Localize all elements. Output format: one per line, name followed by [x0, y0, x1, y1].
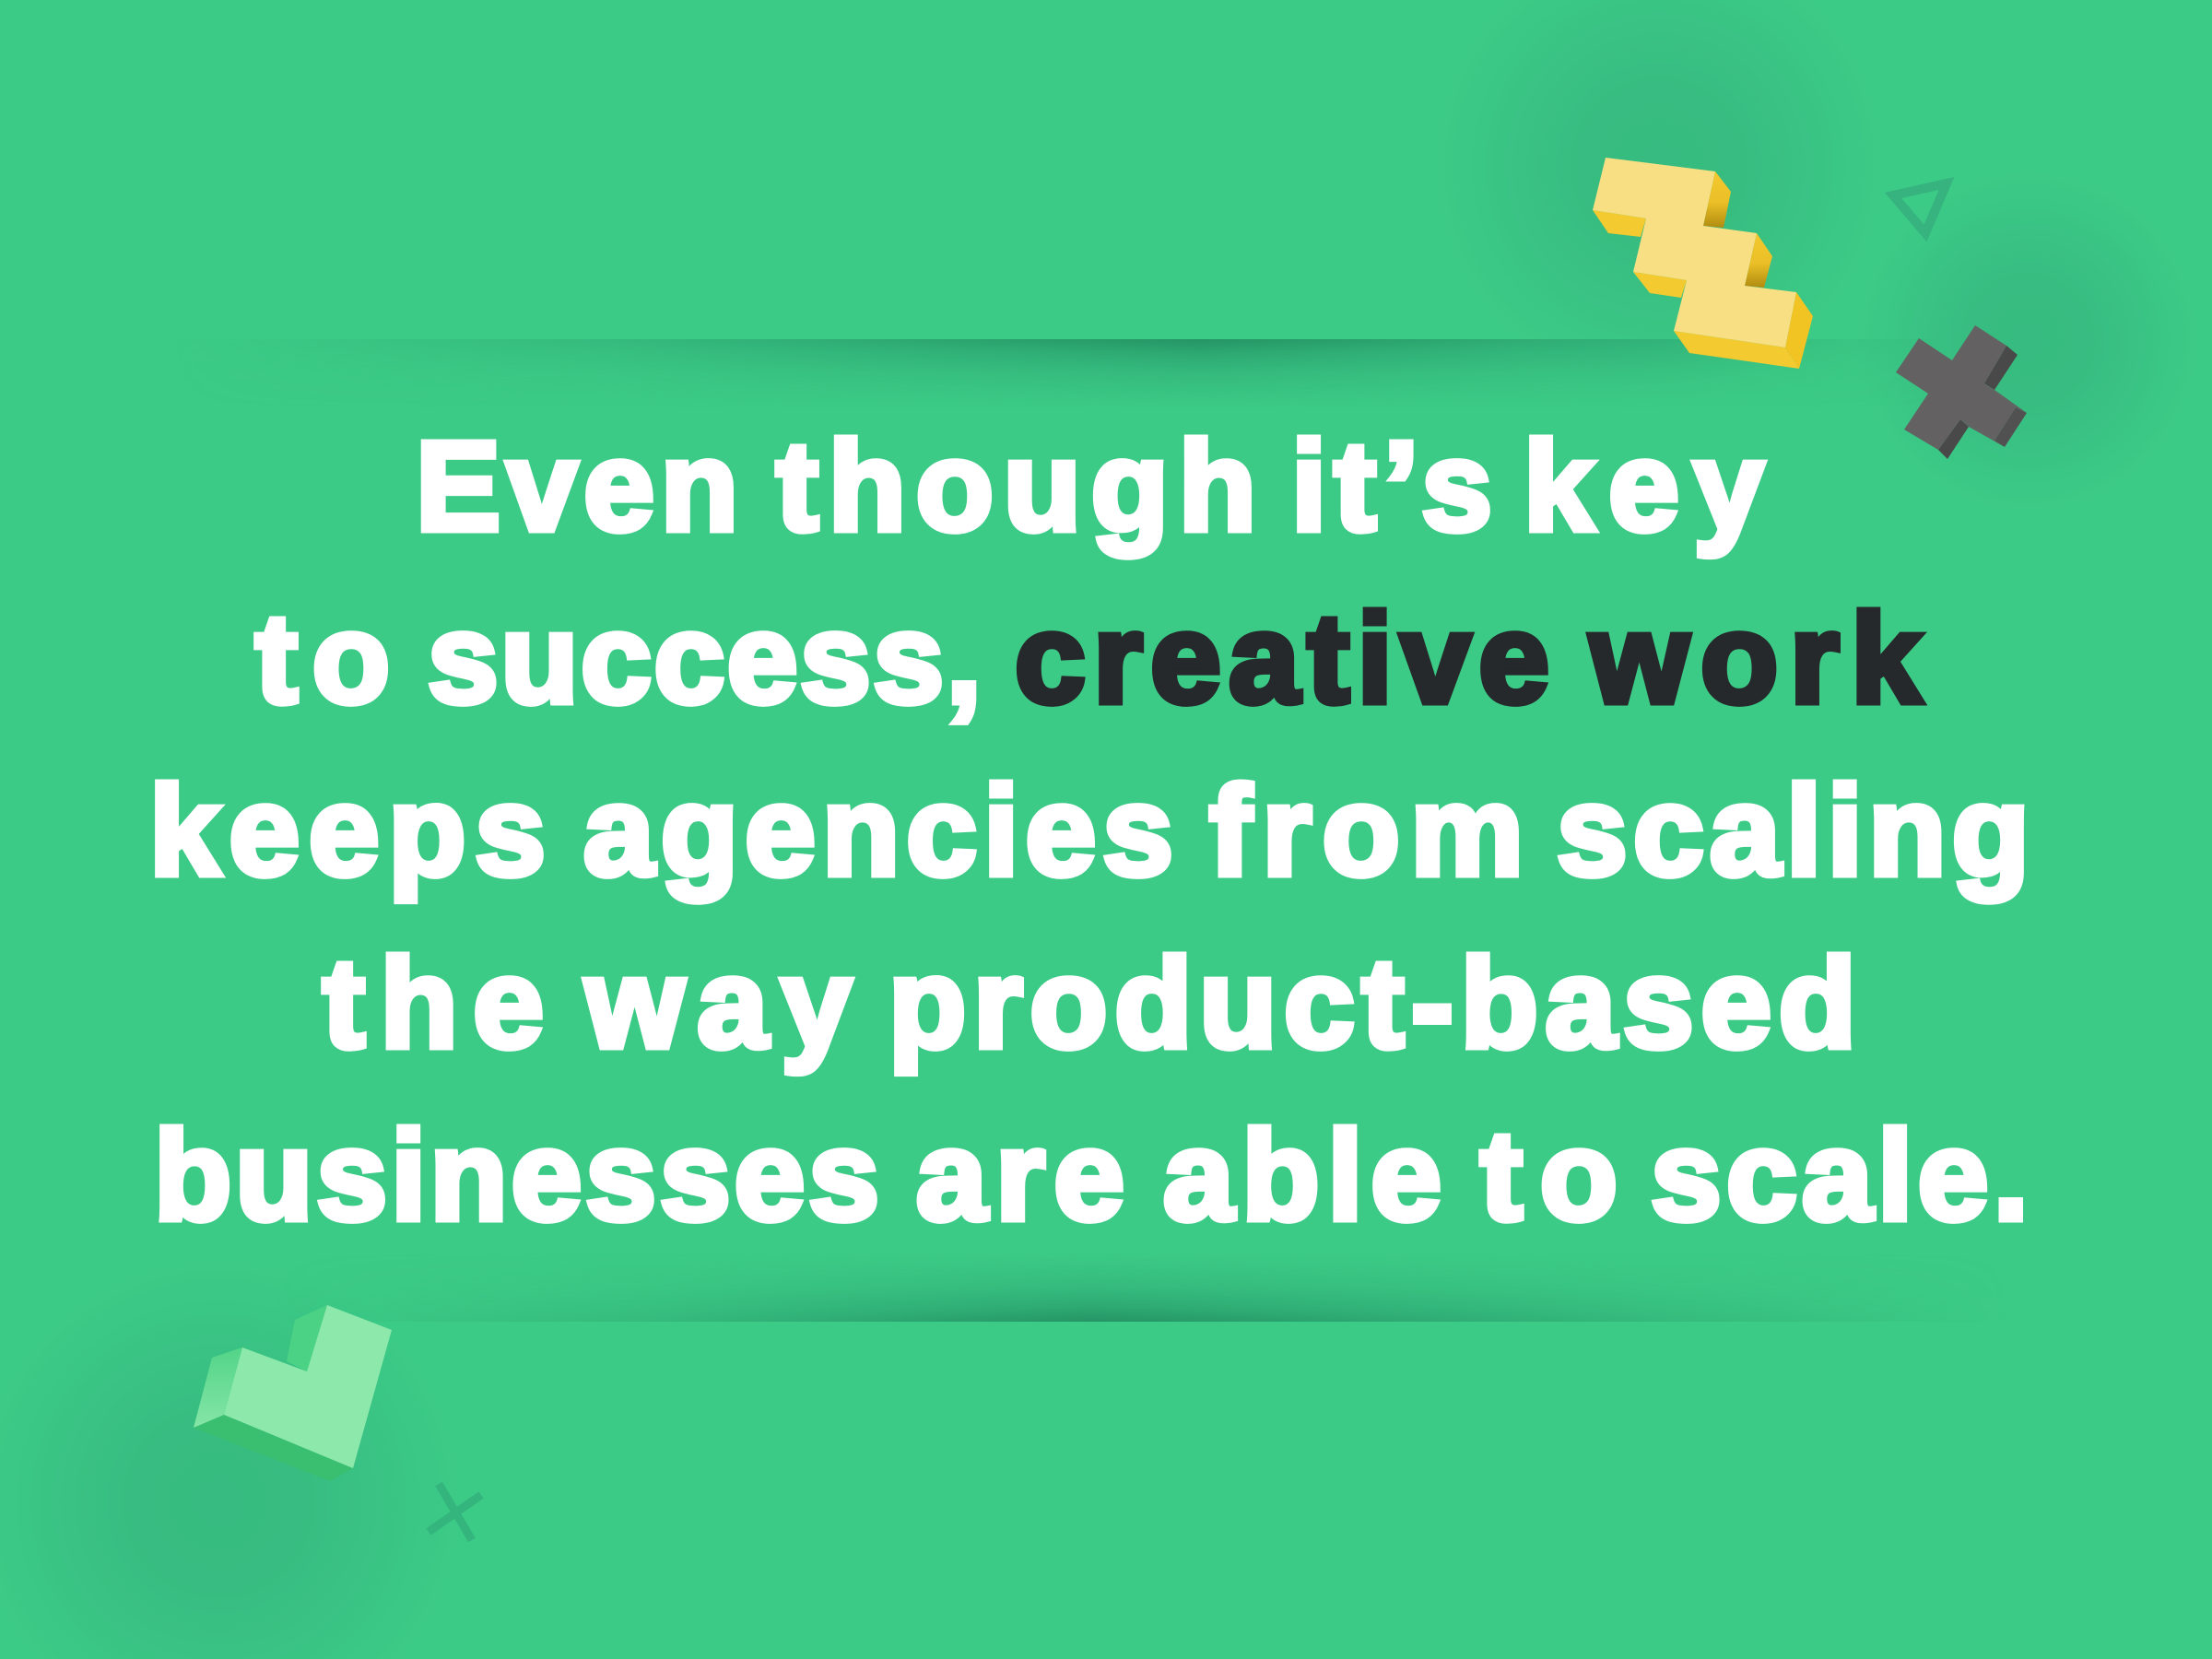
- line 5: to: [1480, 1105, 1618, 1247]
- icon: yellow zigzag block: [1593, 158, 1813, 369]
- bottom divider shadow: [443, 1269, 1862, 1322]
- line 5: scale.: [1651, 1105, 2029, 1247]
- line 1: though: [776, 416, 1256, 558]
- line 3: keeps: [149, 760, 546, 902]
- line 1: key: [1524, 416, 1764, 558]
- line 2: [255, 588, 1922, 730]
- line 4: [323, 933, 1856, 1075]
- line 3: [149, 760, 2030, 902]
- line 3: from: [1209, 760, 1524, 902]
- line 2: work: [1589, 588, 1922, 730]
- line 1: [416, 416, 1764, 558]
- line 5: are: [916, 1105, 1124, 1247]
- heading statement: [149, 416, 2030, 1247]
- line 2: to: [255, 588, 390, 730]
- line 2: creative: [1015, 588, 1549, 730]
- halo: behind yellow block: [1429, 0, 1889, 396]
- halo: behind green block: [0, 1253, 467, 1659]
- icon: green L block: [194, 1305, 392, 1481]
- line 4: way: [584, 933, 852, 1075]
- line 1: it’s: [1291, 416, 1492, 558]
- icon: outlined triangle: [1893, 183, 1947, 233]
- line 2: success,: [428, 588, 982, 730]
- line 4: product-based: [888, 933, 1856, 1075]
- halo: behind dark cross: [1853, 166, 2203, 516]
- line 1: Even: [416, 416, 738, 558]
- line 5: businesses: [154, 1105, 879, 1247]
- line 4: the: [323, 933, 544, 1075]
- icon: dark cross: [1896, 325, 2027, 459]
- line 3: agencies: [583, 760, 1173, 902]
- line 5: able: [1163, 1105, 1441, 1247]
- line 5: [154, 1105, 2029, 1247]
- top divider shadow: [369, 339, 1845, 392]
- icon: small x mark: [429, 1484, 481, 1540]
- line 3: scaling: [1557, 760, 2030, 902]
